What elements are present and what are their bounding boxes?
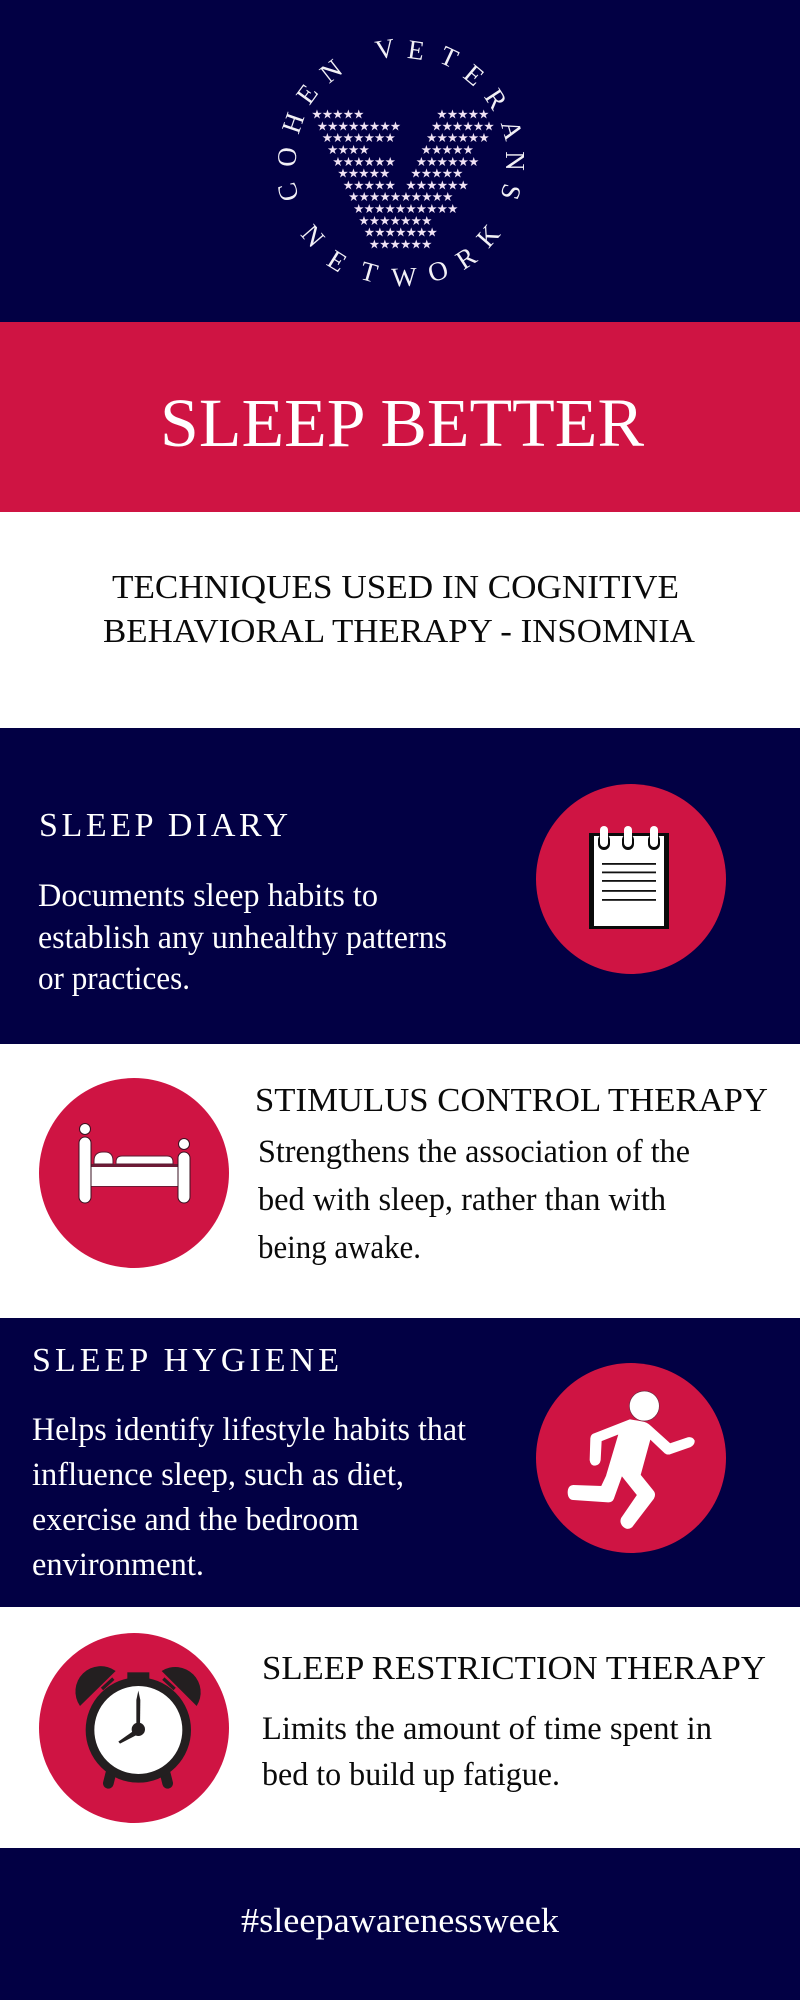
logo ring text: T [357, 255, 382, 289]
logo star V: ★★★★★★ [405, 178, 469, 192]
logo star V [311, 106, 495, 252]
text: sleep restriction description [262, 1711, 712, 1793]
text: stimulus control description: being awake. [258, 1230, 421, 1266]
panel: stimulus control therapy [0, 1044, 800, 1318]
header band [0, 0, 800, 322]
logo star V: ★★★★★ [421, 142, 474, 157]
panel: sleep restriction therapy [0, 1607, 800, 1848]
logo ring text: O [424, 254, 452, 288]
subtitle panel: TECHNIQUES USED IN COGNITIVE [112, 569, 679, 606]
title: SLEEP BETTER [160, 385, 644, 461]
logo star V: ★★★★★★ [332, 154, 396, 169]
logo ring text: V [373, 33, 397, 65]
panel: sleep diary [0, 728, 800, 1044]
icon: runner [536, 1363, 726, 1553]
text: sleep diary description: or practices. [38, 961, 190, 997]
text: sleep hygiene description: Helps identify lifestyle habits that [32, 1412, 466, 1448]
text: sleep diary description: Documents sleep habits to [38, 878, 378, 914]
text: sleep hygiene description: exercise and the bedroom [32, 1502, 359, 1538]
logo ring text: N [314, 53, 348, 89]
text: sleep restriction description: Limits the amount of time spent in [262, 1711, 712, 1747]
logo ring text: K [470, 218, 506, 253]
heading: sleep restriction therapy: SLEEP RESTRICTION THERAPY [262, 1650, 766, 1687]
logo star V: ★★★★★★★ [322, 130, 396, 145]
logo star V: ★★★★★★★★★★ [353, 201, 458, 216]
footer band [0, 1848, 800, 2000]
text: sleep hygiene description: environment. [32, 1547, 204, 1583]
text: sleep hygiene description: influence sleep, such as diet, [32, 1457, 404, 1493]
icon: notebook [536, 784, 726, 974]
text: stimulus control description [258, 1134, 690, 1266]
logo star V: ★★★★★ [436, 106, 489, 122]
text: stimulus control description: bed with sleep, rather than with [258, 1182, 666, 1218]
logo ring text: R [479, 83, 513, 115]
logo ring text: S [495, 181, 527, 203]
logo ring text: C [271, 179, 305, 205]
logo star V: ★★★★★ [311, 106, 364, 122]
text: sleep diary description: establish any unhealthy patterns [38, 920, 447, 956]
heading: stimulus control therapy: STIMULUS CONTROL THERAPY [255, 1082, 768, 1119]
logo star V: ★★★★★ [410, 166, 463, 180]
logo star V: ★★★★ [327, 142, 370, 157]
logo star V: ★★★★★★ [369, 236, 432, 252]
logo star V: ★★★★★★★ [364, 224, 438, 240]
text: sleep restriction description: bed to build up fatigue. [262, 1757, 560, 1793]
heading: sleep hygiene: SLEEP HYGIENE [32, 1342, 339, 1379]
logo ring text: E [322, 244, 352, 278]
text: sleep diary description [38, 878, 447, 997]
subtitle panel: BEHAVIORAL THERAPY - INSOMNIA [103, 613, 695, 650]
logo ring text: W [391, 262, 418, 292]
logo ring text: H [276, 109, 310, 137]
logo star V: ★★★★★ [343, 178, 396, 192]
subtitle panel [0, 512, 800, 728]
logo star V: ★★★★★★ [431, 118, 495, 134]
hashtag: #sleepawarenessweek [241, 1901, 560, 1940]
logo star V: ★★★★★★★★ [317, 118, 401, 134]
panel: sleep hygiene [0, 1318, 800, 1607]
logo star V: ★★★★★★ [426, 130, 490, 145]
logo star V: ★★★★★★★ [358, 213, 432, 228]
logo ring text: E [458, 58, 490, 92]
text: sleep hygiene description [32, 1412, 466, 1583]
logo ring text: N [295, 219, 331, 253]
logo ring text: E [290, 79, 324, 109]
logo ring text: N [500, 151, 530, 171]
logo star V: ★★★★★★ [416, 154, 479, 169]
heading: sleep diary: SLEEP DIARY [39, 807, 288, 844]
logo star V: ★★★★★★★★★★ [348, 189, 453, 204]
icon: alarm clock [39, 1633, 229, 1823]
logo ring text: E [406, 34, 426, 66]
logo ring text: A [495, 116, 529, 144]
icon: bed [39, 1078, 229, 1268]
logo ring text: R [450, 241, 482, 275]
logo ring text: T [435, 40, 463, 74]
title banner [0, 322, 800, 512]
logo ring text: O [272, 147, 302, 167]
logo: Cohen Veterans Network [271, 33, 530, 292]
logo star V: ★★★★★ [337, 166, 390, 180]
logo ring text [271, 33, 530, 292]
text: stimulus control description: Strengthens the association of the [258, 1134, 690, 1170]
